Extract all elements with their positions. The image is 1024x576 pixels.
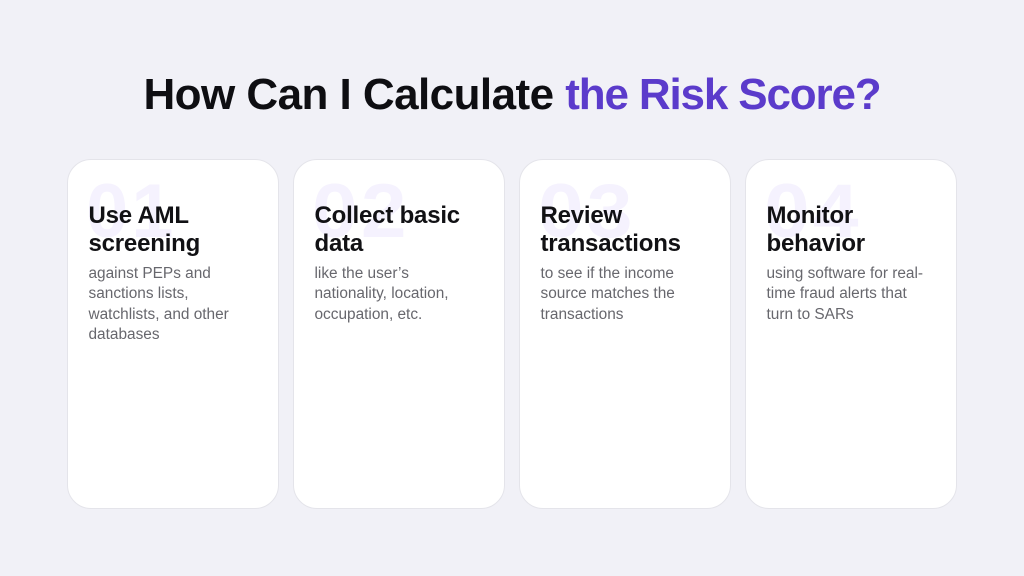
panel: step 4	[745, 159, 957, 509]
text: step 3: transactions	[540, 306, 623, 323]
text: step 1: watchlists, and other	[88, 306, 229, 323]
panel: step 3	[519, 159, 731, 509]
text: step 4: using software for real-	[766, 264, 923, 282]
heading: step 1: Use AML	[88, 202, 189, 229]
heading: step 2: Collect basic	[314, 202, 460, 229]
text: step 2: nationality, location,	[314, 285, 449, 302]
heading: step 4: Monitor	[766, 202, 853, 229]
number 01: 01	[86, 169, 177, 254]
text: step 2: occupation, etc.	[314, 306, 422, 323]
text: step 3: to see if the income	[540, 264, 674, 282]
panel: step 1	[67, 159, 279, 509]
heading: step 4: behavior	[766, 230, 865, 256]
heading: step 1: screening	[88, 230, 200, 256]
heading: step 3	[540, 202, 681, 256]
text: step 1: sanctions lists,	[88, 285, 189, 302]
panel: step 2	[293, 159, 505, 509]
title: How Can I Calculate the Risk Score?	[143, 70, 881, 119]
text: step 1: databases	[88, 326, 160, 343]
heading: step 2	[314, 202, 460, 256]
text: step 4: turn to SARs	[766, 306, 854, 323]
text: step 2: like the user’s	[314, 264, 409, 282]
number 03: 03	[538, 169, 636, 254]
text: step 4: time fraud alerts that	[766, 285, 907, 302]
text: step 4	[766, 264, 923, 323]
text: step 3	[540, 264, 675, 323]
heading: step 2: data	[314, 230, 363, 256]
heading: step 4	[766, 202, 865, 256]
text: step 1	[88, 264, 229, 343]
number 04: 04	[764, 169, 862, 254]
heading: step 3: Review	[540, 202, 622, 229]
text: step 2	[314, 264, 449, 323]
number 02: 02	[312, 169, 410, 254]
heading: step 1	[88, 202, 200, 256]
text: step 3: source matches the	[540, 285, 675, 302]
heading: step 3: transactions	[540, 230, 681, 256]
text: step 1: against PEPs and	[88, 264, 211, 282]
